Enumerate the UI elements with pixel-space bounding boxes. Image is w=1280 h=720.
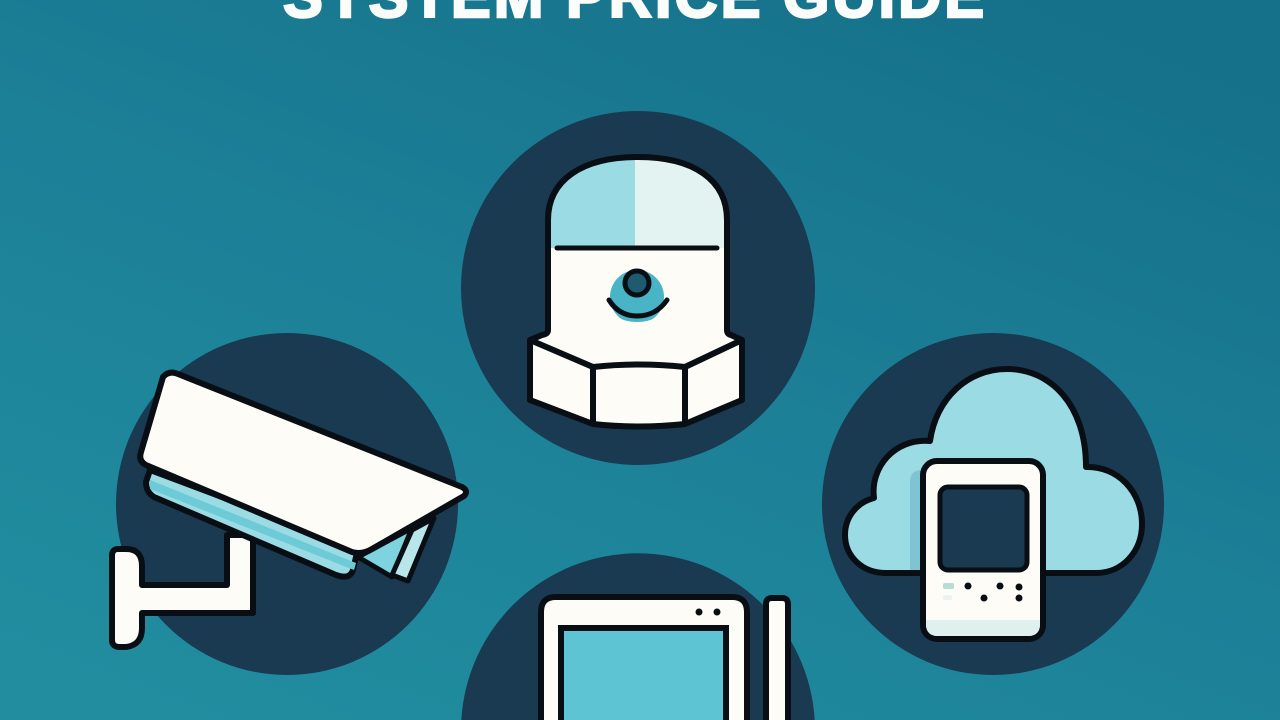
icon: cloud with video doorbell — [822, 333, 1164, 675]
icon: monitor tablet — [461, 553, 815, 720]
icon: bullet camera — [112, 333, 466, 675]
icon: dome camera — [461, 111, 815, 465]
